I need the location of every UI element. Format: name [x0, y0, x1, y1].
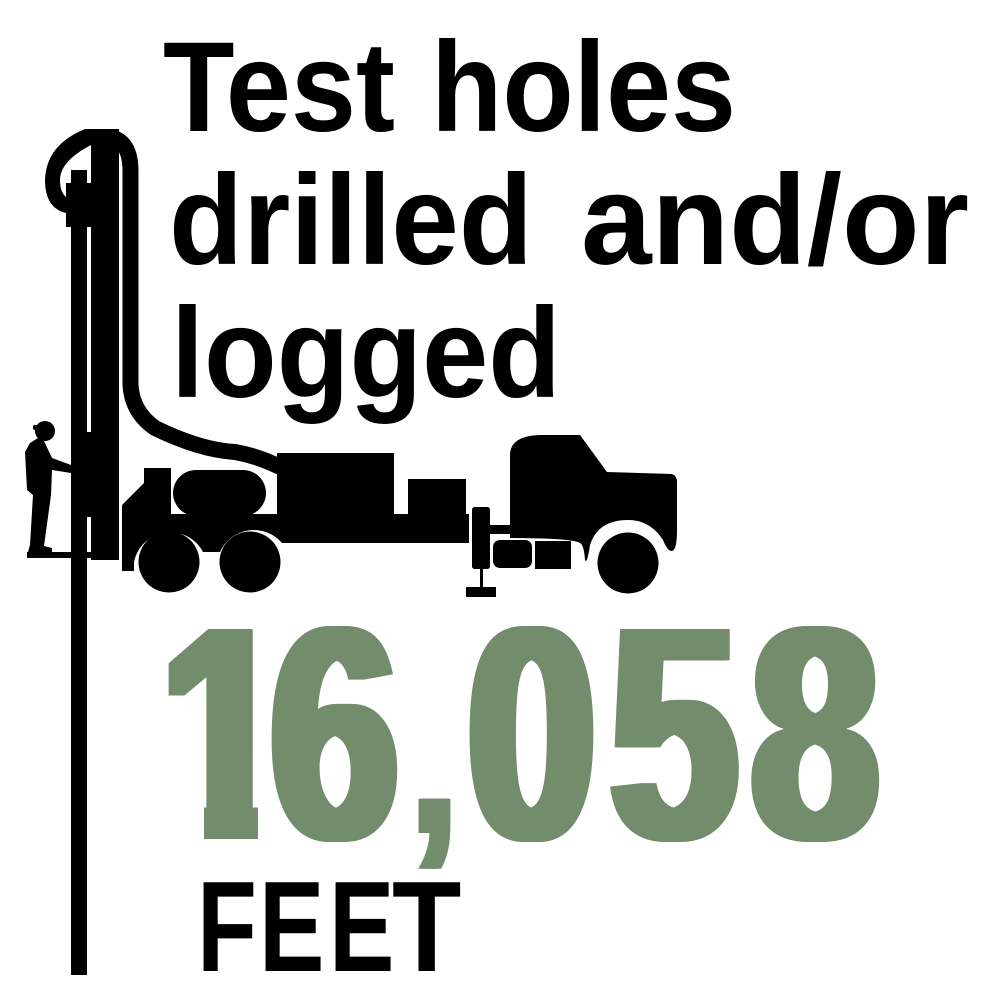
hose loop at mast top [45, 129, 95, 213]
tool box [535, 541, 571, 569]
tank [173, 470, 266, 516]
worker silhouette [25, 421, 71, 552]
wheels [138, 532, 658, 594]
drill mast [66, 129, 119, 975]
unit label: T [392, 855, 461, 999]
title: logged [171, 282, 561, 425]
big number: 0 [468, 563, 595, 904]
big number: 1 [160, 563, 288, 904]
big number [168, 563, 880, 904]
unit label [196, 855, 461, 999]
big number: , [410, 625, 458, 882]
unit label: E [258, 855, 324, 999]
big number: 6 [271, 563, 398, 904]
big number: 8 [752, 563, 879, 904]
unit label: F [196, 855, 256, 999]
unit label: E [328, 855, 394, 999]
title: holes [431, 16, 736, 159]
title [163, 16, 969, 425]
worker platform [27, 552, 91, 558]
truck bed and chassis [122, 453, 469, 571]
fuel tank [493, 540, 532, 568]
title: and/or [581, 149, 969, 292]
title: Test [163, 16, 395, 159]
truck jack [466, 507, 496, 597]
truck cab [490, 435, 677, 561]
icon: drilling rig truck with worker [25, 129, 677, 975]
big number: 5 [610, 563, 738, 904]
title: drilled [169, 149, 533, 292]
drill hose [105, 137, 280, 467]
